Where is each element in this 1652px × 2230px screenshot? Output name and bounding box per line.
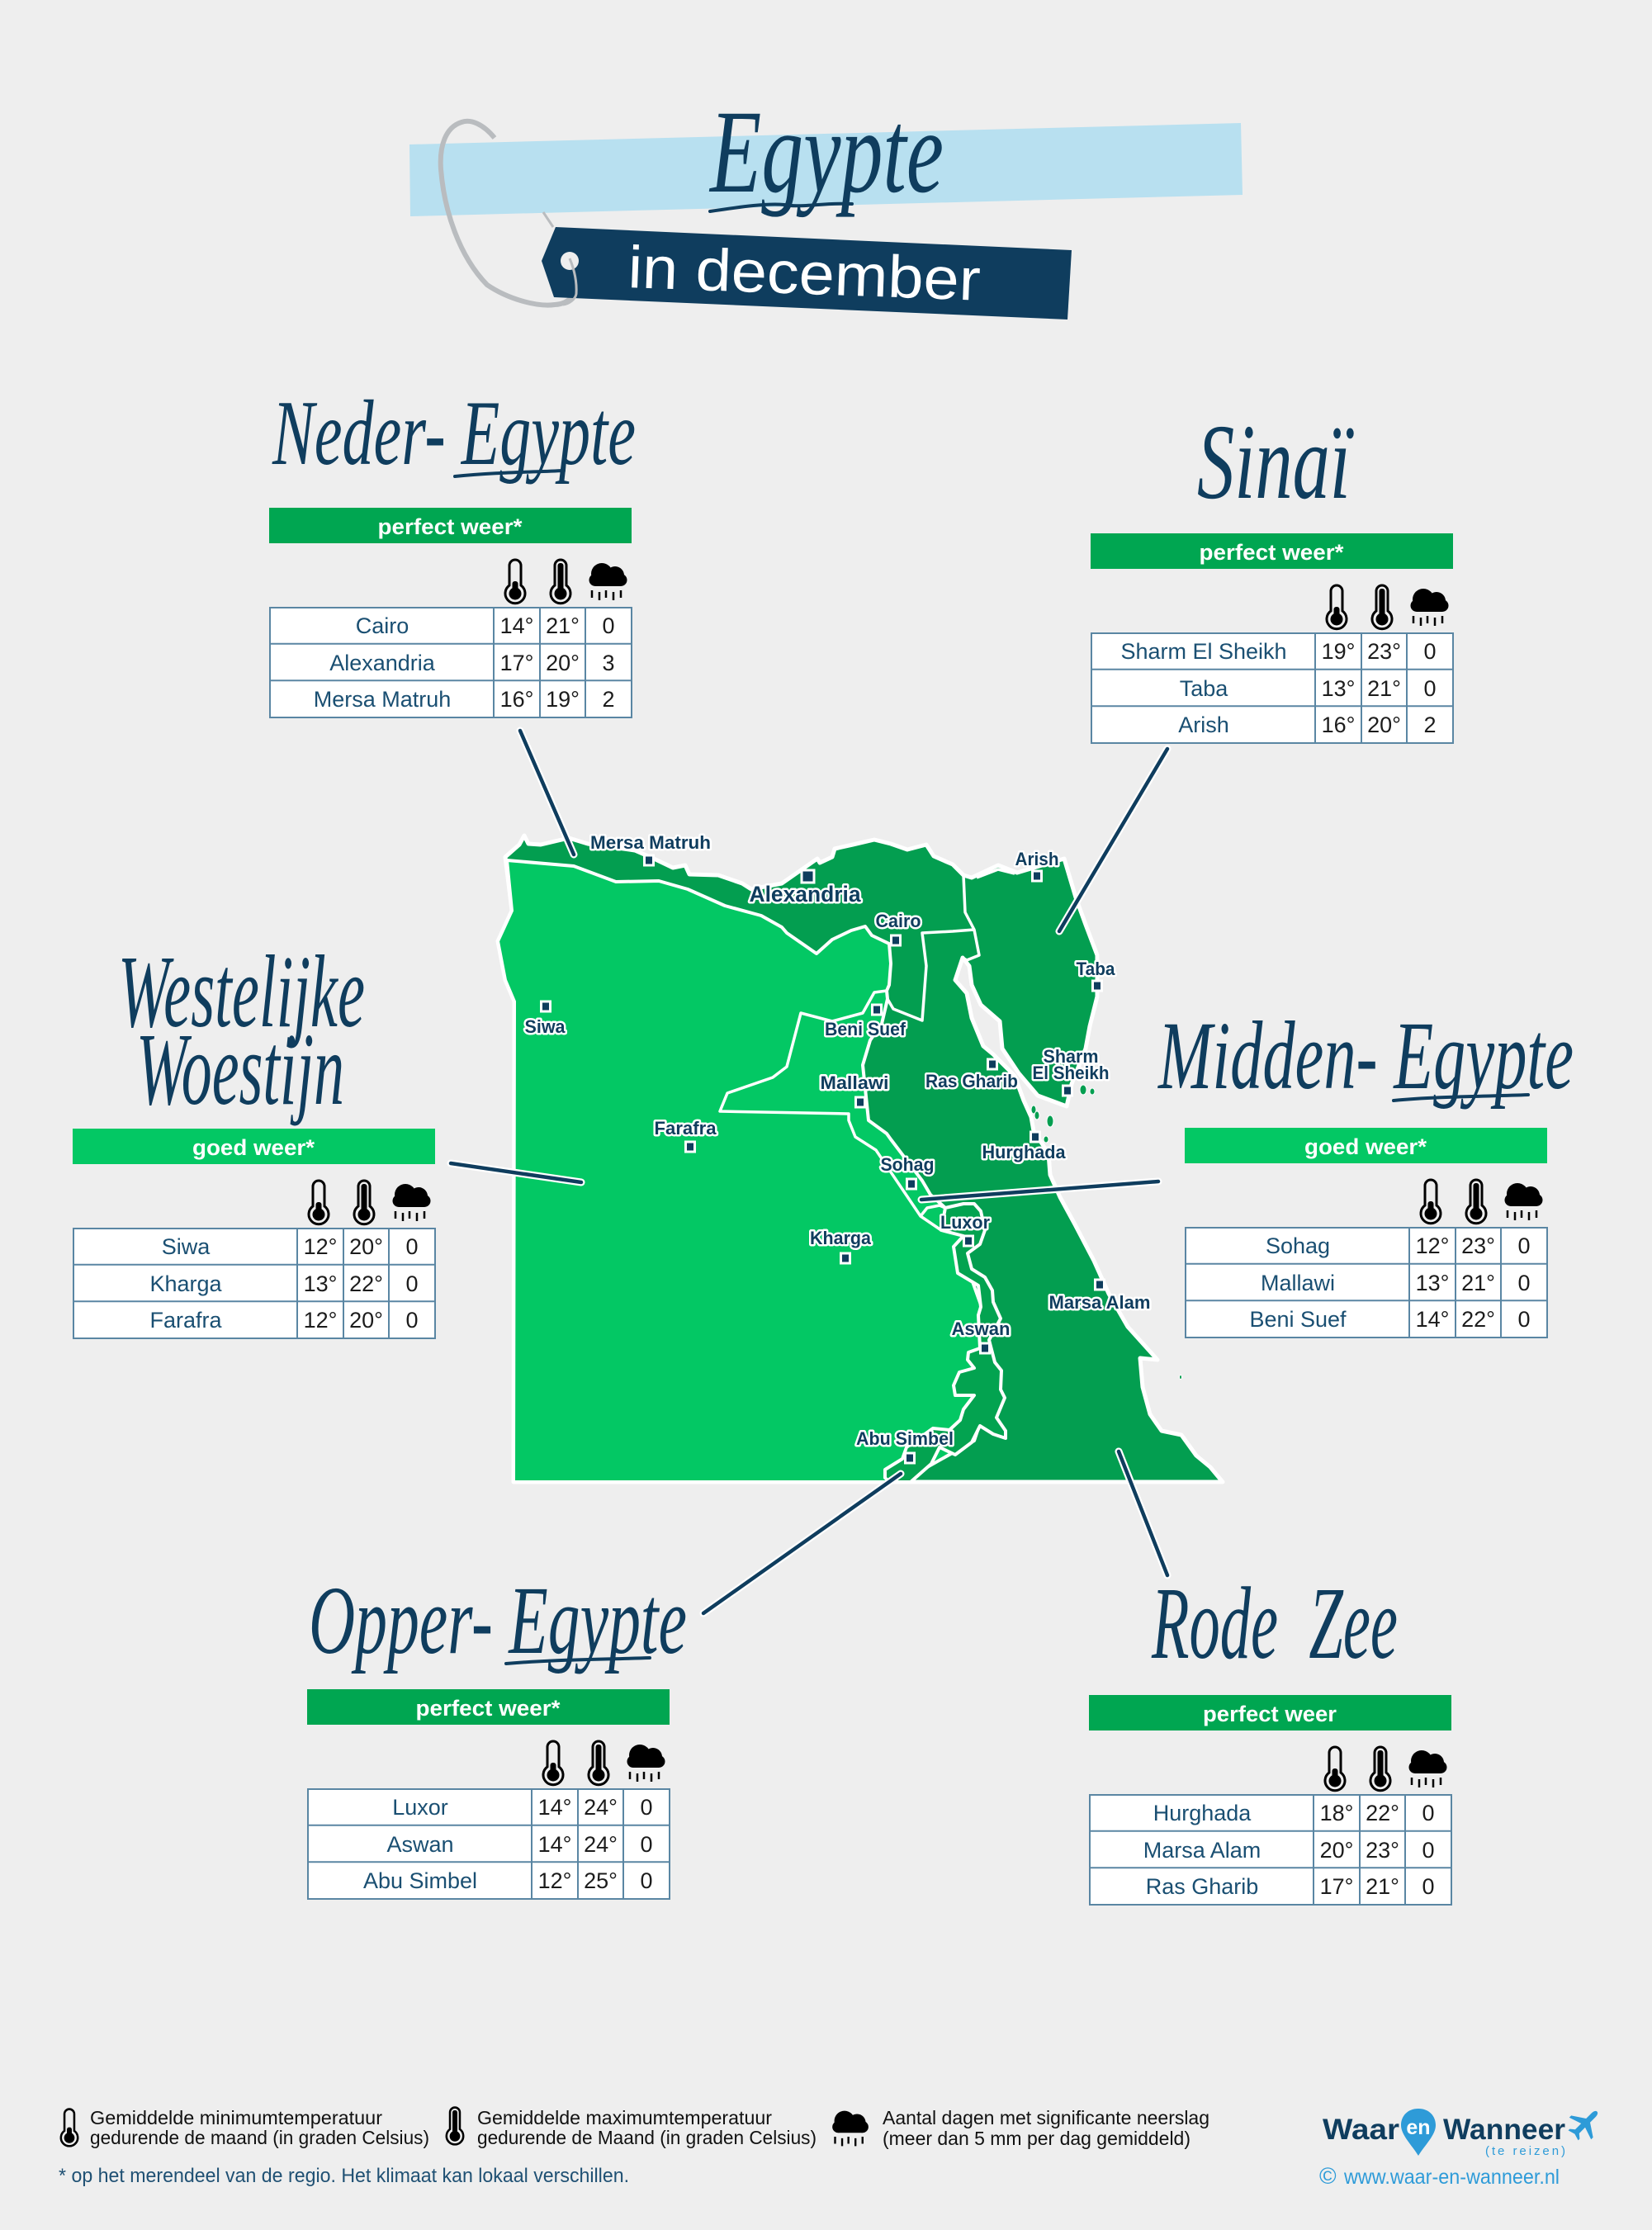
table group [1185,1128,1547,1338]
legend: precipitation: (meer dan 5 mm per dag gemiddeld) [883,2128,1190,2149]
table group [307,1689,670,1899]
logo: Waar: Waar [1323,2114,1399,2146]
climate table: Cairo [356,613,409,638]
climate table: 22° [1366,1801,1399,1825]
logo: te reizen: (te reizen) [1485,2144,1565,2158]
heading: Woestijn: Woestijn [136,1013,344,1127]
city labels: Marsa Alam [1048,1292,1151,1313]
icon: rain cloud [1504,1183,1542,1220]
icon: min thermometer [1421,1180,1441,1224]
icon: rain cloud [393,1184,431,1221]
logo: pin [1401,2109,1436,2156]
icon: max thermometer [354,1181,374,1224]
icon: rain cloud [1408,1750,1446,1787]
icon: max thermometer [551,560,570,604]
climate table: 23° [1366,1838,1399,1863]
climate table: 13° [1322,676,1355,701]
city labels: Siwa [525,1016,566,1037]
tag hole [561,252,579,270]
heading: Neder-Egypte: Neder- Egypte [272,382,636,485]
legend: precipitation [832,2107,1209,2149]
rating band: perfect weer* [378,514,523,539]
climate table: Beni Suef [1249,1307,1347,1332]
city labels: Sharm [1044,1046,1098,1067]
title: Egypte: Egypte [709,87,944,218]
table group [269,508,632,717]
climate table: 0 [1517,1271,1531,1295]
western desert and middle Egypt: light regions [498,860,987,1482]
legend [59,2107,1209,2187]
legend: minimum temperature: Gemiddelde minimumtemperatuur [90,2107,382,2128]
pointer: Neder-Egypte [520,731,574,855]
climate table [73,1228,435,1338]
icon: plane [1562,2100,1608,2147]
table group [73,1129,435,1338]
title swash [710,204,852,211]
city labels: Mersa Matruh [590,832,711,853]
rating band: perfect weer [1203,1702,1337,1726]
climate table [308,1788,670,1899]
climate table: Mersa Matruh [314,687,451,712]
loop stroke [441,121,577,305]
climate table: 20° [1320,1838,1353,1863]
title block [409,87,1243,320]
climate table: 14° [538,1832,571,1857]
panel: Midden-Egypte [1157,1001,1574,1338]
icon: max thermometer [1372,585,1392,629]
icon: rain cloud [1410,589,1448,626]
climate table: Siwa [162,1234,211,1259]
city labels: Aswan [951,1319,1011,1339]
climate table: 0 [1423,639,1437,664]
climate table: 0 [640,1832,653,1857]
heading: Westelijke: Westelijke [118,935,365,1049]
logo [1319,2100,1608,2189]
city labels: Alexandria [750,882,861,907]
city labels: Beni Suef [825,1019,906,1039]
climate table: Sharm El Sheikh [1120,639,1287,664]
climate table: 18° [1320,1801,1353,1825]
climate table: 0 [640,1795,653,1820]
climate table: 0 [1517,1233,1531,1258]
rating band: perfect weer* [416,1696,561,1721]
city labels: Ras Gharib [925,1071,1018,1091]
climate table: 0 [1517,1307,1531,1332]
heading: Opper-Egypte: Opper- Egypte [309,1566,687,1674]
climate table: 24° [584,1832,618,1857]
climate table: 22° [1461,1307,1495,1332]
string over tag [543,212,576,305]
climate table: 3 [602,651,615,675]
climate table: 19° [546,687,580,712]
table group [1091,533,1453,743]
table group [1089,1695,1451,1905]
climate table: 2 [1423,713,1437,737]
climate table: Alexandria [329,651,436,675]
climate table: Hurghada [1153,1801,1252,1825]
icon: copyright: © [1319,2163,1337,2189]
climate table: Taba [1180,676,1228,701]
rating band [269,508,632,543]
climate table: Mallawi [1261,1271,1335,1295]
climate table: 20° [1367,713,1401,737]
climate table: 0 [602,613,615,638]
climate table: 14° [538,1795,571,1820]
rating band: goed weer* [1304,1134,1427,1159]
city labels: Taba [1077,959,1115,979]
icon: min thermometer [1325,1747,1345,1791]
climate table: Abu Simbel [363,1868,477,1893]
legend: minimum temperature: gedurende de maand (in graden Celsius) [90,2127,429,2148]
climate table: 23° [1367,639,1401,664]
country outline: dark regions [498,836,1223,1482]
climate table: 0 [1422,1801,1435,1825]
rating band [1091,533,1453,569]
city labels: Luxor [940,1212,990,1233]
heading: Rode Zee: Rode Zee [1151,1567,1398,1681]
city labels [525,832,1151,1449]
rating band [307,1689,670,1725]
climate table: Luxor [392,1795,448,1820]
pointer: Rode Zee [1119,1451,1167,1575]
footnote: * op het merendeel van de regio. Het klimaat kan lokaal verschillen. [59,2165,629,2187]
heading swash [455,471,564,476]
icon: max thermometer [1466,1180,1486,1224]
navy tag [542,227,1072,320]
legend: maximum temperature: gedurende de Maand (in graden Celsius) [477,2127,817,2148]
city labels: Abu Simbel [856,1428,954,1449]
climate table: 21° [1367,676,1401,701]
climate table: 21° [1461,1271,1495,1295]
climate table: 0 [640,1868,653,1893]
logo: en: en [1406,2116,1431,2139]
map of Egypt [451,731,1223,1613]
climate table: 12° [1416,1233,1449,1258]
climate table: 0 [405,1234,419,1259]
rating band [73,1129,435,1164]
city labels: El Sheikh [1032,1063,1110,1083]
icon: max thermometer [589,1741,608,1785]
subtitle: in december [627,234,982,314]
pointer: Sinai [1059,749,1167,931]
climate table: 22° [349,1271,383,1296]
city labels: Mallawi [821,1072,888,1093]
icon: max thermometer [1370,1747,1390,1791]
pointer: Westelijke Woestijn [451,1163,581,1182]
city labels: Cairo [875,911,921,931]
climate table [270,607,632,717]
city markers [542,855,1105,1463]
climate table: Aswan [386,1832,454,1857]
upper Egypt Nile strip [885,1204,1006,1482]
climate table: 14° [500,613,533,638]
city labels: Kharga [810,1228,872,1248]
panel: Rode Zee [1089,1567,1451,1905]
climate table [1091,632,1453,743]
legend: minimum temperature [61,2107,429,2148]
icon: min thermometer [543,1741,563,1785]
icon: rain cloud [589,563,627,600]
panel: Neder-Egypte [269,382,636,717]
climate table: 12° [538,1868,571,1893]
rating band [1089,1695,1451,1730]
climate table: 0 [1422,1838,1435,1863]
heading: Sinai: Sinaï [1197,403,1354,522]
city labels: Arish [1015,849,1058,869]
climate table: 2 [602,687,615,712]
heading swash [1394,1095,1528,1101]
climate table: Sohag [1266,1233,1330,1258]
climate table: 16° [1322,713,1355,737]
climate table: 16° [500,687,533,712]
title band [409,123,1243,216]
climate table [1186,1227,1547,1338]
climate table: Arish [1178,713,1229,737]
climate table: 12° [304,1308,337,1333]
panel: Opper-Egypte [307,1566,687,1899]
climate table: 23° [1461,1233,1495,1258]
climate table: 20° [349,1234,383,1259]
climate table: 19° [1322,639,1355,664]
pointer: Midden-Egypte [921,1181,1158,1200]
icon: min thermometer [1327,585,1347,629]
climate table: 0 [405,1308,419,1333]
climate table: 0 [1422,1874,1435,1899]
climate table: 0 [1423,676,1437,701]
rating band [1185,1128,1547,1163]
climate table: 13° [304,1271,337,1296]
legend: maximum temperature [447,2107,817,2148]
icon: min thermometer [505,560,525,604]
climate table: 20° [349,1308,383,1333]
legend: precipitation: Aantal dagen met significante neerslag [883,2107,1209,2128]
climate table: 0 [405,1271,419,1296]
climate table: 13° [1416,1271,1449,1295]
website: www.waar-en-wanneer.nl [1343,2166,1560,2189]
climate table: Kharga [149,1271,223,1296]
region borders [720,869,1015,1230]
rating band: goed weer* [192,1135,315,1160]
climate table: 12° [304,1234,337,1259]
pointer: Opper-Egypte [703,1474,901,1613]
climate table [1090,1794,1451,1905]
tag string [441,121,577,306]
climate table: 17° [1320,1874,1353,1899]
city labels: Sohag [880,1154,935,1175]
climate table: 14° [1416,1307,1449,1332]
icon: rain cloud [627,1745,665,1782]
legend: maximum temperature: Gemiddelde maximumtemperatuur [477,2107,772,2128]
heading swash [506,1658,650,1664]
panel: Sinai [1091,403,1453,743]
city labels: Hurghada [982,1142,1066,1162]
logo: Wanneer: Wanneer [1443,2114,1565,2146]
climate table: 24° [584,1795,618,1820]
rating band: perfect weer* [1199,540,1344,565]
climate table: 21° [1366,1874,1399,1899]
islands [1031,1085,1182,1379]
climate table: 17° [500,651,533,675]
panel: Westelijke Woestijn [73,935,435,1338]
climate table: 21° [546,613,580,638]
climate table: Marsa Alam [1143,1838,1261,1863]
climate table: Ras Gharib [1146,1874,1258,1899]
climate table: Farafra [149,1308,222,1333]
climate table: 25° [584,1868,618,1893]
icon: min thermometer [309,1181,329,1224]
city labels: Farafra [654,1118,717,1139]
climate table: 20° [546,651,580,675]
